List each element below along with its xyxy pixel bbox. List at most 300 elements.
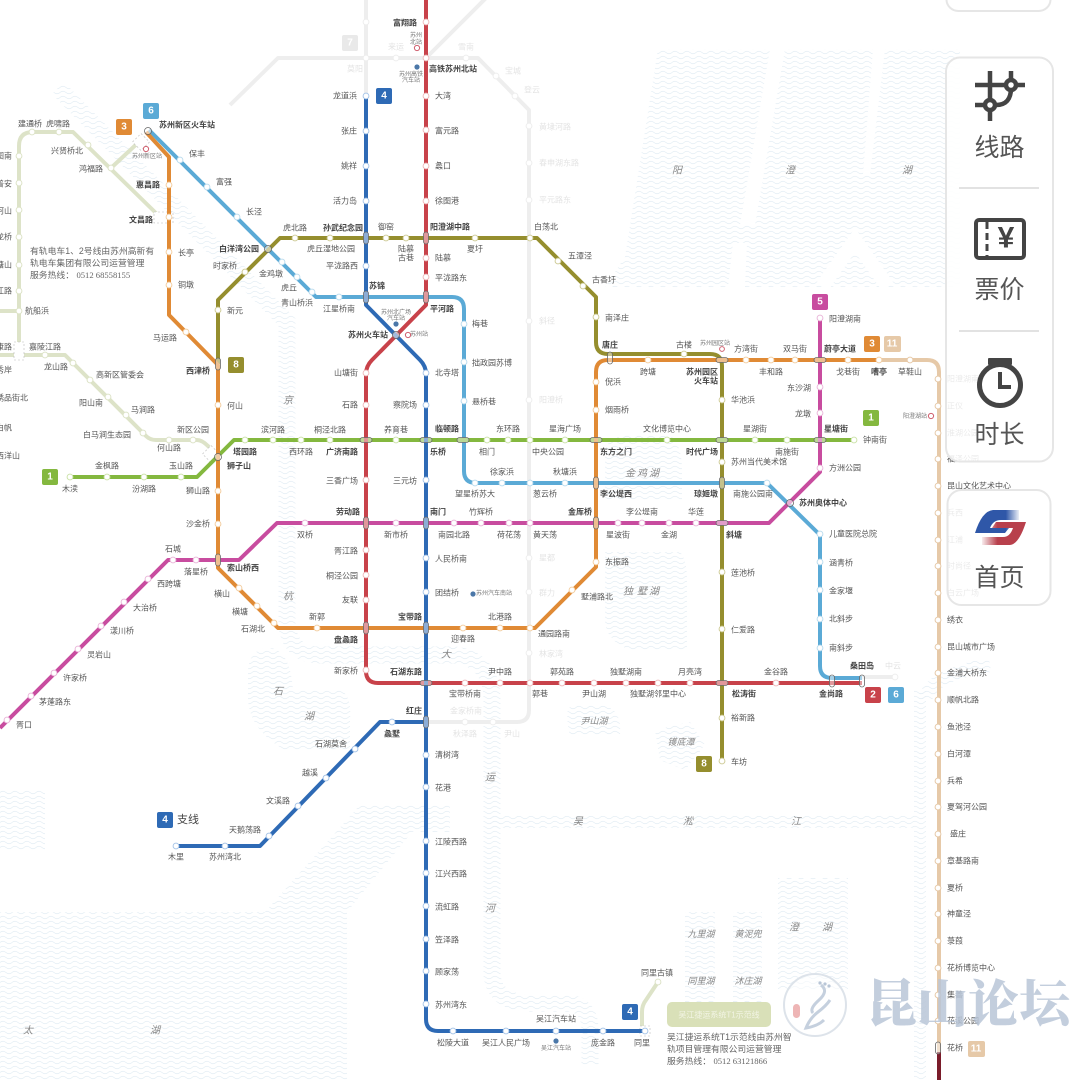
labels: metro stations: 狮子山 xyxy=(227,460,251,470)
line number badges: 4 xyxy=(381,90,387,102)
line number badges: 1 xyxy=(47,472,53,482)
lake and river names: 杭 xyxy=(283,590,295,602)
labels: metro stations: 汾湖路 xyxy=(132,484,156,494)
labels: line 11: 阳澄湖南 xyxy=(947,374,979,384)
line 7 and planned lines (grey): 莫阳 xyxy=(347,64,363,74)
line 7 and planned lines (grey) xyxy=(230,0,901,738)
labels: line 11: 顺帆北路 xyxy=(947,694,979,704)
labels: metro stations: 龙道浜 xyxy=(333,90,357,100)
labels: metro stations: 索山桥西 xyxy=(227,562,259,572)
labels: metro stations: 苏锦 xyxy=(369,280,385,290)
line number badges: 1 xyxy=(868,412,874,424)
lake and river names: 九里湖 xyxy=(687,929,716,939)
labels: metro stations: 黄天荡 xyxy=(533,530,557,540)
line number badges: 8 xyxy=(701,758,707,770)
labels: line 11: 章基路南 xyxy=(947,856,979,866)
line number badges: 4 xyxy=(162,814,168,826)
labels: metro stations: 灵岩山 xyxy=(87,650,111,660)
line number badges: 6 xyxy=(893,690,899,700)
lake and river names: 阳 xyxy=(672,164,684,176)
tram transfer dashed boxes xyxy=(14,134,650,1036)
labels: metro stations: 星海广场 xyxy=(549,424,581,434)
labels: metro stations: 西环路 xyxy=(289,446,313,456)
lake and river names: 大 xyxy=(441,648,452,660)
labels: line 11: 兵希 xyxy=(947,776,963,786)
lake and river names: 金 xyxy=(625,468,637,480)
labels: metro stations: 顾家荡 xyxy=(435,966,459,976)
labels: metro stations: 孙武纪念园 xyxy=(323,222,363,232)
note: tram operator: 轨电车集团有限公司运营管理 xyxy=(30,257,145,268)
labels: metro stations: 郭巷 xyxy=(532,688,548,698)
icon: metro logo xyxy=(975,510,1026,545)
labels: metro stations: 漾川桥 xyxy=(110,626,134,636)
labels: metro stations: 许家桥 xyxy=(63,672,87,682)
labels: metro stations: 通园路南 xyxy=(538,628,570,638)
labels: trams: 建通桥 xyxy=(18,118,42,128)
labels: metro stations: 红庄 xyxy=(406,706,422,716)
small railway and bus station annotations: 苏州汽车南站 xyxy=(476,589,512,597)
lake and river names: 湖 xyxy=(304,710,316,722)
labels: metro stations: 古楼 xyxy=(676,340,692,350)
small railway and bus station annotations: 吴江汽车站 xyxy=(541,1044,571,1052)
line number badges: 3 xyxy=(869,338,875,350)
labels: metro stations: 落星桥 xyxy=(184,566,208,576)
labels: metro stations: 江陵西路 xyxy=(435,836,467,846)
watermark: logo and forum name: 昆山论坛 xyxy=(866,977,1075,1034)
labels: metro stations: 越溪 xyxy=(302,768,318,778)
labels: metro stations: 盘蠡路 xyxy=(334,634,358,644)
labels: metro stations: 琼姬墩 xyxy=(694,488,718,498)
labels: metro stations: 何山 xyxy=(227,400,243,410)
icon: ticket: ¥ xyxy=(998,222,1015,254)
labels: line 11: 江浦 xyxy=(947,534,963,544)
small railway and bus station annotations: 汽车站 xyxy=(387,314,405,322)
labels: line 11: 夏桥 xyxy=(947,882,963,892)
labels: metro stations: 乐桥 xyxy=(430,446,446,456)
labels: metro stations: 跨塘 xyxy=(640,366,656,376)
labels: metro stations: 苏州湾东 xyxy=(435,1000,467,1010)
labels: metro stations: 徐图港 xyxy=(435,196,459,206)
labels: metro stations: 华池浜 xyxy=(731,394,755,404)
nav panel: routes, fares, duration xyxy=(946,58,1053,462)
labels: trams: 马涧路 xyxy=(131,404,155,414)
labels: metro stations: 蔚亭大道 xyxy=(824,344,856,354)
labels: metro stations: 迎春路 xyxy=(451,634,475,644)
labels: metro stations: 中央公园 xyxy=(532,446,564,456)
labels: metro stations: 虎丘湿地公园 xyxy=(307,244,355,254)
small railway and bus station annotations: 苏州北广场 xyxy=(381,308,411,316)
labels: metro stations: 茅蓬路东 xyxy=(39,696,71,706)
line 7 and planned lines (grey): 尹山 xyxy=(504,728,520,738)
watermark: logo and forum name xyxy=(784,974,1075,1036)
labels: trams: 高新区管委会 xyxy=(96,370,144,380)
labels: metro stations: 青山桥浜 xyxy=(281,298,313,308)
labels: metro stations: 长泾 xyxy=(246,206,262,216)
lake and river names: 沐庄湖 xyxy=(734,976,763,986)
lake and river names: 尹山湖 xyxy=(580,716,609,726)
labels: line 11: 兵西 xyxy=(947,508,963,518)
labels: metro stations: 钟南街 xyxy=(863,434,887,444)
labels: metro stations: 五潭泾 xyxy=(568,252,592,260)
labels: trams: 白马涧生态园 xyxy=(83,430,131,440)
labels: metro stations: 木里 xyxy=(168,852,184,862)
labels: metro stations: 郭苑路 xyxy=(550,666,574,676)
small railway and bus station annotations: 苏州新区站 xyxy=(132,152,162,160)
nav panel: top partial xyxy=(946,0,1050,11)
labels: line 11: 福泽公园 xyxy=(947,454,979,464)
labels: line 11: 淮湖公园 xyxy=(947,428,979,438)
line 7 and planned lines (grey): 林家湾 xyxy=(539,648,563,658)
line 7 and planned lines (grey): 星都 xyxy=(539,554,555,562)
labels: trams: 嘉陵江路 xyxy=(29,342,61,352)
labels: metro stations: 戈巷街 xyxy=(836,366,860,376)
labels: metro stations: 东环路 xyxy=(496,424,520,434)
labels: metro stations: 星湖街 xyxy=(743,424,767,434)
lake and river names: 镬底潭 xyxy=(667,737,696,747)
labels: metro stations: 华莲 xyxy=(688,506,704,516)
labels: metro stations: 木渎 xyxy=(62,484,78,494)
labels: metro stations: 车坊 xyxy=(731,756,747,766)
line 8 xyxy=(215,235,725,764)
labels: metro stations: 沙金桥 xyxy=(186,518,210,528)
labels: metro stations: 荷花荡 xyxy=(497,530,521,540)
labels: metro stations: 桐泾公园 xyxy=(326,570,358,580)
lake and river names: 鸡 xyxy=(637,468,648,480)
lake and river names: 同里湖 xyxy=(687,976,716,986)
labels: metro stations: 石城 xyxy=(165,544,181,554)
labels: metro stations: 李公堤南 xyxy=(626,506,658,516)
line 3 xyxy=(146,132,882,631)
labels: metro stations: 东振路 xyxy=(605,556,629,566)
nav panel: routes, fares, duration: 时长 xyxy=(974,421,1025,449)
small railway and bus station annotations: 苏州高铁 xyxy=(399,70,423,78)
labels: metro stations: 东沙湖 xyxy=(787,382,811,392)
labels: metro stations: 富翔路 xyxy=(393,18,417,28)
labels: line 11: 盛庄 xyxy=(950,828,966,838)
labels: metro stations: 望星桥苏大 xyxy=(455,488,495,498)
labels: metro stations: 方湾街 xyxy=(734,344,758,354)
lake and river names: 墅 xyxy=(637,586,649,598)
nav panel: routes, fares, duration: 线路 xyxy=(974,134,1025,162)
small railway and bus station annotations: 阳澄湖站 xyxy=(903,412,927,420)
labels: metro stations: 平泷路西 xyxy=(326,260,358,270)
labels: metro stations: 苏州园区 xyxy=(686,366,718,376)
lake and river names: 石 xyxy=(273,686,285,698)
labels: metro stations: 吴江人民广场 xyxy=(482,1038,530,1048)
line 11 xyxy=(879,357,1011,1080)
labels: metro stations xyxy=(16,18,887,1048)
badge: line 7 xyxy=(342,35,358,51)
note: tram operator: 有轨电车1、2号线由苏州高新有 xyxy=(30,245,154,256)
labels: line 11: 花桥 xyxy=(947,1042,963,1052)
line 7 and planned lines (grey): 平元路东 xyxy=(539,194,571,204)
line number badges: 3 xyxy=(121,122,127,132)
labels: metro stations: 夏圩 xyxy=(467,244,483,254)
labels: metro stations: 金鸡墩 xyxy=(259,268,283,278)
labels: metro stations: 双桥 xyxy=(297,530,313,540)
labels: metro stations: 陆慕 xyxy=(435,252,451,262)
labels: metro stations: 长亭 xyxy=(178,248,194,258)
labels: metro stations: 白洋湾公园 xyxy=(219,244,259,254)
labels: metro stations: 劳动路 xyxy=(336,506,360,516)
labels: metro stations: 李公堤西 xyxy=(600,488,632,498)
labels: metro stations: 笠泽路 xyxy=(435,934,459,944)
note: tram operator: 服务热线： 0512 68558155 xyxy=(30,269,130,280)
labels: metro stations: 新元 xyxy=(227,306,243,316)
labels: metro stations: 广济南路 xyxy=(326,446,358,456)
line 7 and planned lines (grey): 宝城 xyxy=(505,66,521,76)
labels: metro stations: 江星桥南 xyxy=(323,304,355,314)
labels: metro stations: 虎北路 xyxy=(283,222,307,232)
labels: metro stations: 儿童医院总院 xyxy=(829,528,877,538)
labels: line 11: 集善 xyxy=(947,990,963,1000)
line 7 and planned lines (grey): 黄埭河路 xyxy=(539,122,571,132)
labels: metro stations: 阳澄湖中路 xyxy=(430,222,470,232)
line 7 and planned lines (grey): 秋泽路 xyxy=(453,728,477,738)
labels: metro stations: 葱云桥 xyxy=(533,488,557,498)
note: T1 operator: 服务热线： 0512 63121866 xyxy=(667,1055,768,1066)
labels: metro stations: 金家堰 xyxy=(829,586,853,596)
labels: metro stations: 金枫路 xyxy=(95,460,119,470)
line 7 and planned lines (grey): 来运 xyxy=(388,42,404,52)
lake and river names: 独 xyxy=(623,586,634,598)
labels: metro stations: 大湾 xyxy=(435,90,451,100)
labels: metro stations: 惠昌路 xyxy=(136,180,160,190)
labels: metro stations: 友联 xyxy=(342,594,358,604)
labels: metro stations: 三香广场 xyxy=(326,476,358,486)
labels: metro stations: 涵青桥 xyxy=(829,558,853,568)
labels: metro stations: 蠡墅 xyxy=(384,728,400,738)
labels: metro stations: 花港 xyxy=(435,782,451,792)
labels: metro stations: 大治桥 xyxy=(133,602,157,612)
labels: metro stations: 东方之门 xyxy=(600,446,632,456)
labels: line 11: 夏驾河公园 xyxy=(947,802,987,812)
labels: metro stations: 山塘街 xyxy=(334,368,358,378)
line 7 and planned lines (grey): 群力 xyxy=(539,588,555,598)
labels: metro stations: 平泷路东 xyxy=(435,272,467,282)
labels: metro stations: 南园北路 xyxy=(438,530,470,540)
labels: metro stations: 文昌路 xyxy=(129,214,153,224)
lake and river names: 淞 xyxy=(683,816,694,828)
labels: metro stations: 悬桥巷 xyxy=(472,396,496,406)
labels: metro stations: 流虹路 xyxy=(435,902,459,912)
labels: metro stations: 斜塘 xyxy=(726,530,742,540)
labels: metro stations: 北港路 xyxy=(488,612,512,622)
small railway and bus station annotations: 汽车站 xyxy=(402,76,420,84)
labels: metro stations: 唐庄 xyxy=(602,340,618,350)
line 7 and planned lines (grey): 登云 xyxy=(524,84,540,94)
labels: metro stations: 横塘 xyxy=(232,606,248,616)
labels: metro stations: 胥江路 xyxy=(334,546,358,556)
labels: metro stations: 北斜步 xyxy=(829,614,853,624)
labels: metro stations: 南斜步 xyxy=(829,642,853,652)
labels: metro stations: 阳澄湖南 xyxy=(829,314,861,324)
line 5 xyxy=(0,315,823,728)
labels: metro stations: 金湖 xyxy=(661,530,677,540)
labels: metro stations: 竹辉桥 xyxy=(469,506,493,516)
branch line label: 支线 xyxy=(177,812,199,826)
lake and river names: 运 xyxy=(485,772,496,784)
labels: metro stations: 西津桥 xyxy=(186,366,210,376)
line 7 and planned lines (grey): 雪南 xyxy=(458,42,474,52)
labels: metro stations: 相门 xyxy=(479,446,495,456)
labels: metro stations: 龙墩 xyxy=(795,408,811,418)
labels: metro stations: 新郭 xyxy=(309,612,325,622)
labels: line 11: 金浦大桥东 xyxy=(947,668,987,678)
labels: metro stations: 文溪路 xyxy=(266,796,290,806)
labels: metro stations: 梅巷 xyxy=(472,318,488,328)
labels: metro stations: 时家桥 xyxy=(213,260,237,270)
labels: line 11: 昆山城市广场 xyxy=(947,642,995,652)
labels: line 11: 时尚径 xyxy=(947,560,971,570)
line 2 xyxy=(363,0,862,686)
labels: trams: 兴贤桥北 xyxy=(51,146,83,156)
lake and river names: 澄 xyxy=(785,164,797,176)
labels: metro stations: 尹山湖 xyxy=(582,688,606,698)
note: T1 operator xyxy=(667,1031,792,1066)
labels: metro stations: 苏州火车站 xyxy=(348,330,388,340)
note: tram operator xyxy=(30,245,154,280)
note: T1 operator: 吴江捷运系统T1示范线由苏州智 xyxy=(667,1031,792,1042)
labels: metro stations: 星波街 xyxy=(606,530,630,540)
labels: metro stations: 活力岛 xyxy=(333,196,357,206)
labels: trams: 新区公园 xyxy=(177,424,209,434)
labels: metro stations: 莲池桥 xyxy=(731,568,755,578)
labels: metro stations: 时代广场 xyxy=(686,446,718,456)
line number badges: 5 xyxy=(817,296,823,308)
labels: metro stations: 御窑 xyxy=(378,222,394,232)
T1 demonstration line label xyxy=(667,1002,771,1027)
labels: metro stations: 北寺塔 xyxy=(435,368,459,378)
labels: metro stations: 临顿路 xyxy=(435,424,459,434)
labels: trams: 虎啸路 xyxy=(46,118,70,128)
lake and river names: 吴 xyxy=(573,816,584,828)
labels: metro stations: 松陵大道 xyxy=(437,1038,469,1048)
small railway and bus station annotations: 北站 xyxy=(410,38,422,46)
line 1 xyxy=(67,437,857,480)
labels: metro stations: 石湖东路 xyxy=(390,666,422,676)
labels: metro stations: 徐家浜 xyxy=(490,466,514,476)
labels: line 11 xyxy=(898,366,1011,1052)
labels: trams: 何山路 xyxy=(157,442,181,452)
labels: metro stations: 墅浦路北 xyxy=(581,592,613,602)
labels: trams: 阳山南 xyxy=(79,398,103,408)
T1 demonstration line label: 吴江捷运系统T1示范线 xyxy=(678,1010,760,1020)
labels: metro stations: 南泽庄 xyxy=(605,312,629,322)
tram lines xyxy=(0,118,673,1036)
labels: line 11: 花桥博览中心 xyxy=(947,962,995,972)
labels: metro stations: 蠡口 xyxy=(435,160,451,170)
labels: line 11: 绣衣 xyxy=(947,614,963,624)
labels: metro stations: 吴江汽车站 xyxy=(536,1014,576,1024)
line number badges: 11 xyxy=(971,1044,982,1054)
labels: metro stations: 横山 xyxy=(214,588,230,598)
line number badges: 8 xyxy=(233,360,239,370)
labels: metro stations: 石路 xyxy=(342,400,358,410)
labels: metro stations: 同里 xyxy=(634,1038,650,1048)
line number badges: 4 xyxy=(627,1006,633,1018)
lake and river names: 澄 xyxy=(789,922,801,934)
labels: metro stations: 嘈亭 xyxy=(871,366,887,376)
lake and river names: 黄泥兜 xyxy=(734,929,762,939)
labels: metro stations: 双马街 xyxy=(783,344,807,354)
labels: metro stations: 金厍桥 xyxy=(568,506,592,516)
lake and river names: 京 xyxy=(283,394,295,406)
labels: line 11: 昆山文化艺术中心 xyxy=(947,480,1011,490)
lake and river names: 江 xyxy=(791,816,802,828)
small railway and bus station annotations: 苏州园区站 xyxy=(700,339,730,347)
labels: line 11: 花溪公园 xyxy=(947,1016,979,1026)
line number badges: 6 xyxy=(148,106,154,116)
labels: metro stations: 塔园路 xyxy=(233,446,257,456)
labels: metro stations: 清树湾 xyxy=(435,750,459,760)
labels: metro stations: 平河路 xyxy=(430,304,454,314)
labels: metro stations: 桑田岛 xyxy=(850,660,874,670)
icon: ticket xyxy=(976,220,1024,258)
note: T1 operator: 轨项目管理有限公司运营管理 xyxy=(667,1043,782,1054)
labels: metro stations: 庞金路 xyxy=(591,1038,615,1048)
labels: metro stations: 富强 xyxy=(216,176,232,186)
labels: metro stations: 拙政园苏博 xyxy=(472,358,512,368)
labels: metro stations: 尹中路 xyxy=(488,666,512,676)
labels: metro stations: 保丰 xyxy=(189,148,205,158)
labels: metro stations: 滨河路 xyxy=(261,424,285,434)
labels: metro stations: 铜墩 xyxy=(178,280,194,290)
labels: line 11: 正仪 xyxy=(947,402,963,410)
labels: metro stations: 星塘街 xyxy=(824,424,848,434)
labels: metro stations: 金谷路 xyxy=(764,666,788,676)
labels: metro stations: 古巷 xyxy=(398,252,414,262)
labels: metro stations: 察院场 xyxy=(393,400,417,410)
labels: metro stations: 天鹅荡路 xyxy=(229,824,261,834)
labels: metro stations: 新市桥 xyxy=(384,530,408,540)
labels: metro stations: 狮山路 xyxy=(186,486,210,496)
labels: metro stations: 倪浜 xyxy=(605,376,621,386)
line number badges xyxy=(42,88,985,1057)
labels: metro stations: 宝带桥南 xyxy=(449,688,481,698)
labels: line 11: 白河潭 xyxy=(947,748,971,758)
labels: metro stations: 丰和路 xyxy=(759,366,783,376)
labels: trams: 龙山路 xyxy=(44,362,68,372)
labels: metro stations: 西跨塘 xyxy=(157,578,181,588)
badge: line 7: 7 xyxy=(347,38,353,48)
labels: trams: 鸿福路 xyxy=(79,164,103,174)
labels: metro stations: 南施街 xyxy=(775,446,799,456)
lake and river names: 湖 xyxy=(649,468,661,480)
labels: metro stations: 姚祥 xyxy=(341,160,357,170)
line 7 and planned lines (grey): 春申湖东路 xyxy=(539,158,579,168)
labels: metro stations: 南门 xyxy=(430,506,446,516)
labels: metro stations: 人民桥南 xyxy=(435,554,467,564)
small railway and bus station annotations xyxy=(132,31,934,1052)
labels: metro stations: 团结桥 xyxy=(435,588,459,598)
labels: metro stations: 月亮湾 xyxy=(678,666,702,676)
labels: metro stations: 石湖莫舍 xyxy=(315,738,347,748)
lake and river names xyxy=(23,164,914,1036)
labels: line 11: 白云广场 xyxy=(947,588,979,598)
labels: metro stations: 富元路 xyxy=(435,126,459,136)
labels: metro stations: 松涛街 xyxy=(732,688,756,698)
nav panel: home xyxy=(948,490,1050,605)
labels: metro stations: 陆慕 xyxy=(398,244,414,254)
line 6 xyxy=(149,130,862,678)
icon: routes xyxy=(975,71,1025,121)
labels: metro stations: 苏州新区火车站 xyxy=(159,120,215,130)
labels: line 11: 菉葭 xyxy=(947,936,963,946)
labels: metro stations: 苏州当代美术馆 xyxy=(731,456,787,466)
line 7 and planned lines (grey): 中云 xyxy=(885,660,901,670)
labels: metro stations: 新家桥 xyxy=(334,666,358,676)
